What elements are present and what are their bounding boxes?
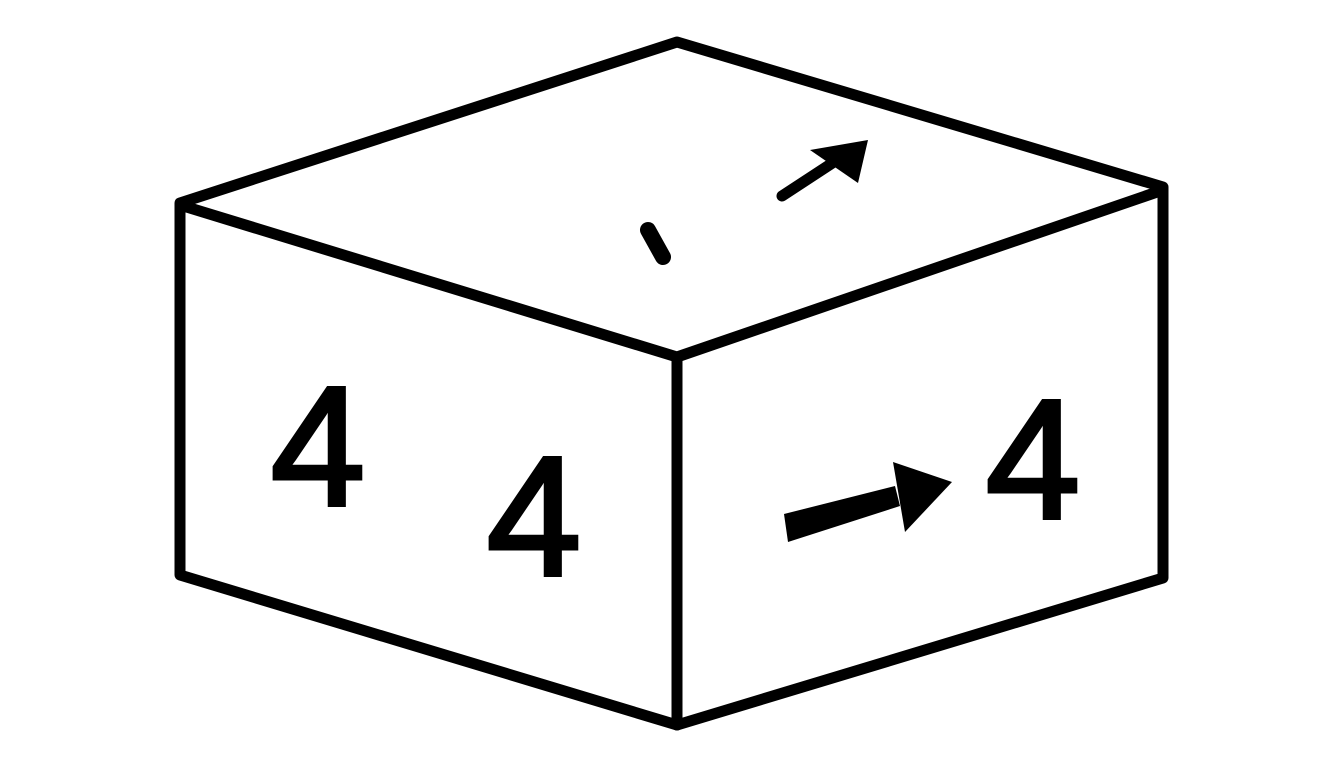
left face number 4: 4 bbox=[271, 352, 365, 542]
right face number 4: 4 bbox=[986, 365, 1080, 555]
box outline bbox=[180, 42, 1163, 725]
right face arrow bbox=[784, 462, 952, 542]
top face mark bbox=[648, 230, 663, 257]
left face number 4 second: 4 bbox=[487, 422, 581, 612]
top face arrow bbox=[782, 140, 868, 196]
